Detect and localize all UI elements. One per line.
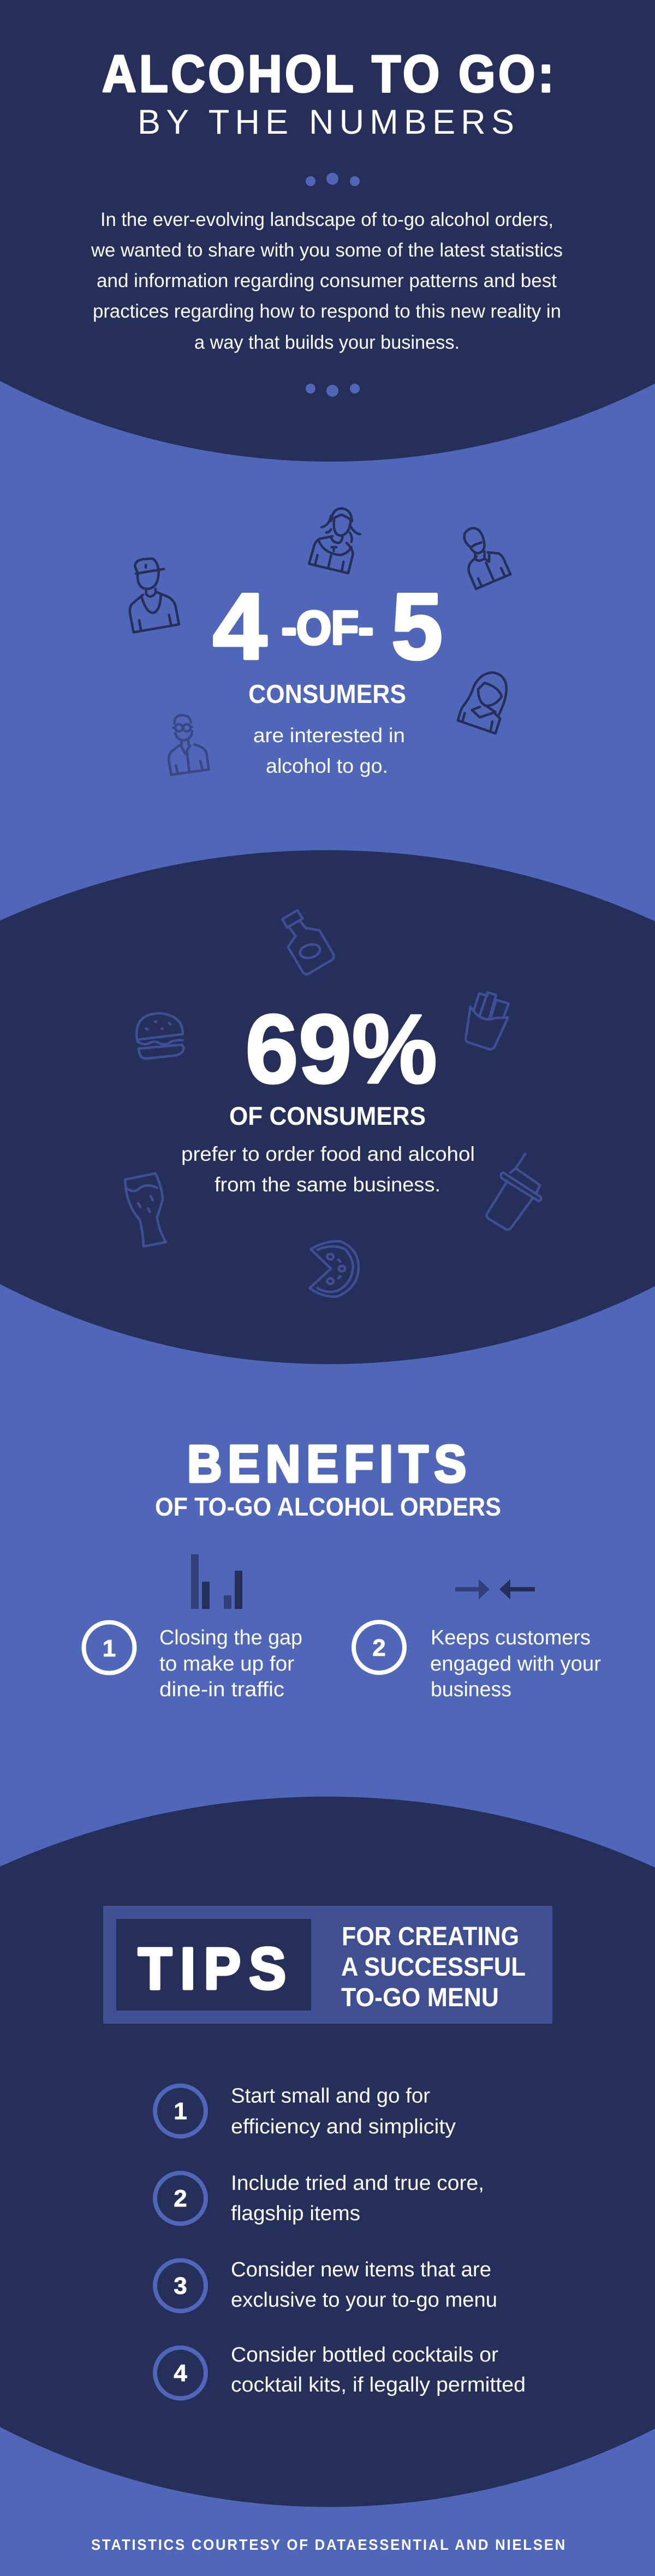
text: prefer: prefer to order food and alcohol xyxy=(181,1143,475,1165)
panel: tips background xyxy=(0,1797,655,2507)
icon: person with long hair xyxy=(309,509,360,573)
icon: woman with long hair xyxy=(458,672,507,734)
icon: fries xyxy=(466,992,509,1050)
tip 2 xyxy=(155,2172,484,2225)
intro text xyxy=(91,209,563,353)
text: prefer: from the same business. xyxy=(215,1173,440,1196)
benefit 2: Keeps customers xyxy=(431,1626,591,1649)
tip 1: Start small and go for xyxy=(231,2085,430,2108)
benefit 1: 1 xyxy=(103,1635,116,1662)
heading: benefits: OF TO-GO ALCOHOL ORDERS xyxy=(155,1492,501,1521)
tip 2: flagship items xyxy=(231,2202,360,2225)
benefit 1: Closing the gap xyxy=(159,1626,302,1649)
benefit 1: dine-in traffic xyxy=(159,1678,284,1701)
panel: 69 percent background xyxy=(0,850,655,1364)
icon: beer glass xyxy=(125,1173,166,1247)
benefit 2: business xyxy=(431,1678,511,1701)
tip 4: cocktail kits, if legally permitted xyxy=(231,2374,526,2396)
text: interested: alcohol to go. xyxy=(266,755,388,777)
title: BY THE NUMBERS xyxy=(138,103,514,141)
icon: person with cap xyxy=(130,559,179,633)
benefit 2: 2 xyxy=(372,1635,386,1661)
intro text: practices regarding how to respond to this new reality in xyxy=(93,301,561,322)
tip 4: Consider bottled cocktails or xyxy=(231,2344,498,2366)
icon: converging arrows xyxy=(455,1579,535,1600)
heading: benefits xyxy=(155,1435,501,1521)
text: prefer xyxy=(181,1143,475,1196)
icon: top dots xyxy=(306,172,360,186)
icon: pizza xyxy=(309,1241,359,1297)
statistic: 69 percent: 69% xyxy=(245,994,437,1104)
icon: person with mustache xyxy=(465,528,510,589)
intro text: a way that builds your business. xyxy=(194,332,460,353)
benefit 1 xyxy=(84,1622,302,1701)
tip 2: 2 xyxy=(174,2185,187,2212)
title xyxy=(102,45,557,141)
icon: cup with straw xyxy=(486,1154,541,1230)
heading: consumers: CONSUMERS xyxy=(248,680,406,709)
statistic: 4 of 5 xyxy=(213,574,443,679)
title: ALCOHOL TO GO: xyxy=(102,45,557,103)
tip 2: Include tried and true core, xyxy=(231,2172,484,2195)
tip 1: 1 xyxy=(174,2098,187,2125)
footer credit: STATISTICS COURTESY OF DATAESSENTIAL AND NIELSEN xyxy=(91,2536,567,2553)
icon: burger xyxy=(136,1013,184,1059)
tip 3: 3 xyxy=(174,2273,187,2299)
intro text: and information regarding consumer patterns and best xyxy=(97,270,557,291)
text: interested: are interested in xyxy=(253,724,405,747)
tip 4 xyxy=(155,2344,526,2398)
statistic: 4 of 5: 4 xyxy=(213,574,267,679)
benefit 1: to make up for xyxy=(159,1653,294,1675)
panel: tips banner: A SUCCESSFUL xyxy=(341,1953,526,1982)
tip 3: Consider new items that are xyxy=(231,2258,491,2281)
intro text: In the ever-evolving landscape of to-go alcohol orders, xyxy=(100,209,553,230)
icon: bottle xyxy=(282,910,334,974)
tip 1 xyxy=(155,2085,456,2138)
panel: tips banner: TIPS xyxy=(138,1935,294,2001)
panel: tips banner: FOR CREATING xyxy=(342,1922,519,1951)
benefit 2: engaged with your xyxy=(430,1653,601,1675)
heading: of consumers: OF CONSUMERS xyxy=(229,1101,426,1130)
tip 3 xyxy=(155,2258,497,2312)
statistic: 4 of 5: -OF- xyxy=(282,602,373,654)
text: interested xyxy=(253,724,405,777)
icon: bottom dots xyxy=(306,384,360,397)
benefit 2 xyxy=(354,1622,601,1701)
tip 1: efficiency and simplicity xyxy=(231,2115,456,2138)
panel: tips banner: TO-GO MENU xyxy=(341,1983,499,2012)
heading: benefits: BENEFITS xyxy=(187,1435,472,1493)
panel: tips banner xyxy=(103,1906,552,2024)
tip 3: exclusive to your to-go menu xyxy=(231,2289,497,2312)
statistic: 4 of 5: 5 xyxy=(391,574,443,679)
panel: header background xyxy=(0,0,655,462)
intro text: we wanted to share with you some of the latest statistics xyxy=(91,240,563,261)
icon: bar chart xyxy=(191,1554,242,1609)
tip 4: 4 xyxy=(174,2360,187,2387)
icon: person with glasses xyxy=(169,715,209,775)
